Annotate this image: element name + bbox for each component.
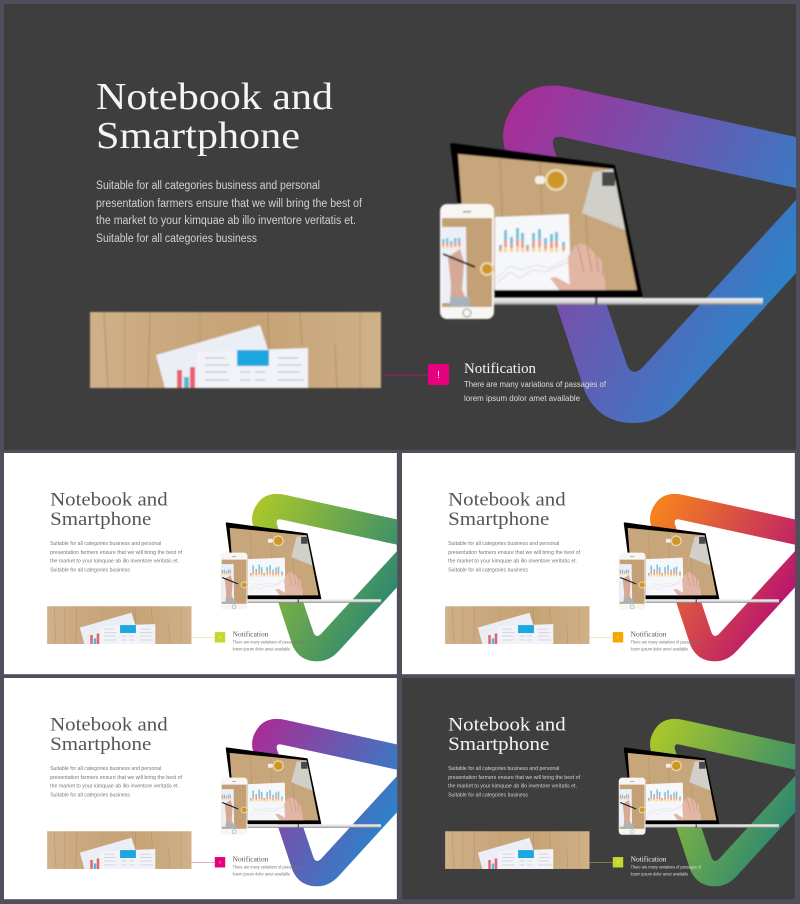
description: Suitable for all categories business <box>448 793 528 799</box>
photo strip <box>47 831 191 869</box>
notebook and smartphone mockup <box>221 522 381 610</box>
triangle: orange to crimson <box>650 494 795 661</box>
description: presentation farmers ensure that we will bring the best of <box>50 550 182 556</box>
connector line <box>589 862 613 864</box>
triangle: violet to blue <box>252 719 397 886</box>
connector line <box>191 636 215 638</box>
triangle: green <box>252 494 397 661</box>
description: presentation farmers ensure that we will bring the best of <box>448 775 580 781</box>
notification heading: Notification <box>631 631 667 639</box>
description: the market to your kimquae ab illo inventore veritatis et. <box>50 784 179 790</box>
title: Smartphone <box>448 509 549 530</box>
notification text: lorem ipsum dolor amet available <box>464 393 580 403</box>
title: Smartphone <box>96 115 300 157</box>
description: Suitable for all categories business and personal <box>448 766 559 772</box>
title: Notebook and <box>50 490 168 511</box>
description: Suitable for all categories business <box>448 568 528 574</box>
title: Notebook and <box>96 76 333 118</box>
notification text: There are many variations of passages of <box>631 639 702 644</box>
description: Suitable for all categories business <box>96 233 257 245</box>
panel: white violet slide <box>4 678 397 899</box>
title: Notebook and <box>448 715 566 736</box>
panel: dark green slide <box>402 678 795 899</box>
description: the market to your kimquae ab illo inventore veritatis et. <box>50 559 179 565</box>
photo strip <box>90 312 381 388</box>
description: the market to your kimquae ab illo inventore veritatis et. <box>96 215 356 227</box>
icon: notification square <box>428 364 449 385</box>
description: Suitable for all categories business and personal <box>50 541 161 547</box>
title: Notebook and <box>50 715 168 736</box>
description: the market to your kimquae ab illo inventore veritatis et. <box>448 559 577 565</box>
description: Suitable for all categories business <box>50 793 130 799</box>
notification text: lorem ipsum dolor amet available <box>233 871 291 876</box>
notification text: There are many variations of passages of <box>233 639 304 644</box>
notification heading: Notification <box>464 361 537 377</box>
notification heading: Notification <box>631 856 667 864</box>
notebook and smartphone mockup <box>221 747 381 835</box>
description: presentation farmers ensure that we will bring the best of <box>50 775 182 781</box>
photo strip <box>445 831 589 869</box>
description: Suitable for all categories business and personal <box>50 766 161 772</box>
notification text: There are many variations of passages of <box>464 379 607 389</box>
description: presentation farmers ensure that we will bring the best of <box>96 198 363 210</box>
notebook and smartphone mockup <box>619 522 779 610</box>
icon: notification square <box>215 632 225 642</box>
notification heading: Notification <box>233 856 269 864</box>
title: Smartphone <box>50 734 151 755</box>
panel: white orange slide <box>402 453 795 674</box>
notification text: lorem ipsum dolor amet available <box>631 646 689 651</box>
icon: notification square: ! <box>219 860 221 866</box>
notification text: lorem ipsum dolor amet available <box>631 871 689 876</box>
description: presentation farmers ensure that we will bring the best of <box>448 550 580 556</box>
connector line <box>191 862 215 864</box>
icon: notification square <box>613 632 623 642</box>
photo strip <box>47 606 191 644</box>
description: Suitable for all categories business and personal <box>96 180 320 192</box>
notification text: There are many variations of passages of <box>631 864 702 869</box>
notification text: lorem ipsum dolor amet available <box>233 646 291 651</box>
notebook and smartphone mockup <box>440 143 763 319</box>
icon: notification square: ! <box>617 860 619 866</box>
notification heading: Notification <box>233 631 269 639</box>
connector line <box>381 374 428 376</box>
connector line <box>589 636 613 638</box>
icon: notification square: ! <box>437 370 440 381</box>
title: Smartphone <box>50 509 151 530</box>
triangle: violet to blue <box>503 86 796 423</box>
icon: notification square <box>215 857 225 867</box>
description: Suitable for all categories business <box>50 568 130 574</box>
icon: notification square: ! <box>617 635 619 641</box>
title: Notebook and <box>448 490 566 511</box>
notebook and smartphone mockup <box>619 747 779 835</box>
panel: large dark violet slide <box>4 4 796 450</box>
title: Smartphone <box>448 734 549 755</box>
triangle: green <box>650 719 795 886</box>
description: Suitable for all categories business and personal <box>448 541 559 547</box>
description: the market to your kimquae ab illo inventore veritatis et. <box>448 784 577 790</box>
icon: notification square: ! <box>219 635 221 641</box>
panel: white green slide <box>4 453 397 674</box>
notification text: There are many variations of passages of <box>233 864 304 869</box>
icon: notification square <box>613 857 623 867</box>
photo strip <box>445 606 589 644</box>
